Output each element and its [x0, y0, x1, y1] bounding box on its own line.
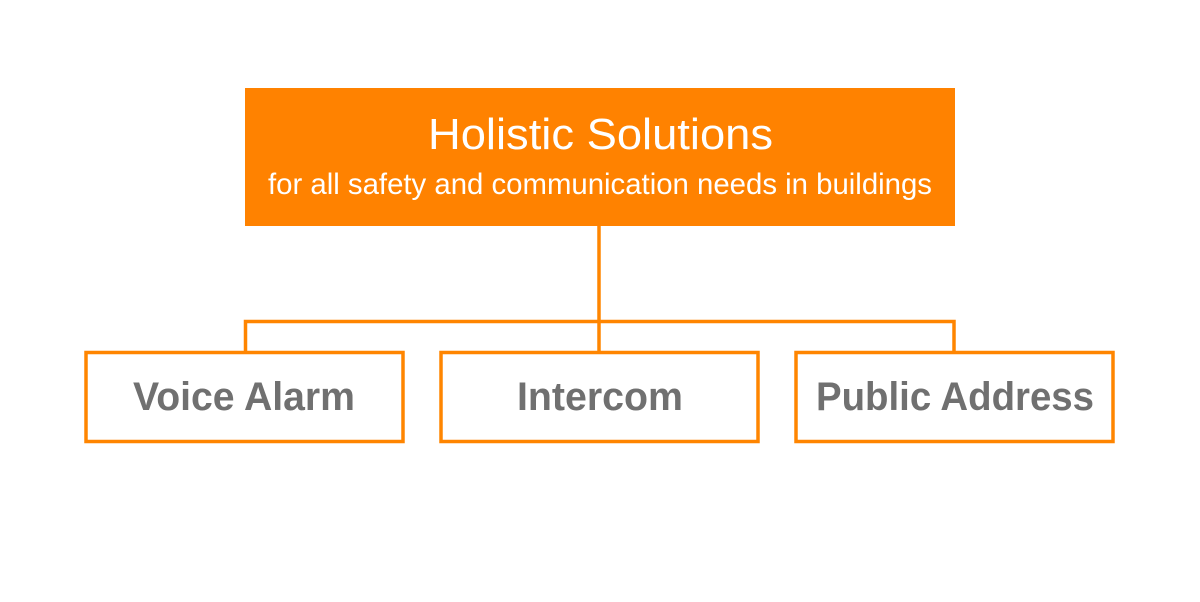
- label: intercom: Intercom: [517, 375, 683, 419]
- heading: holistic solutions: Holistic Solutions: [428, 110, 773, 159]
- box: public address: [796, 352, 1113, 442]
- connector lines: [246, 226, 954, 351]
- label: voice alarm: Voice Alarm: [133, 375, 355, 419]
- subheading: for all safety and communication needs in buildings: [268, 168, 932, 201]
- box: intercom: [441, 352, 758, 442]
- panel: holistic solutions header: [245, 88, 955, 226]
- label: public address: Public Address: [816, 375, 1094, 419]
- box: voice alarm: [86, 352, 403, 442]
